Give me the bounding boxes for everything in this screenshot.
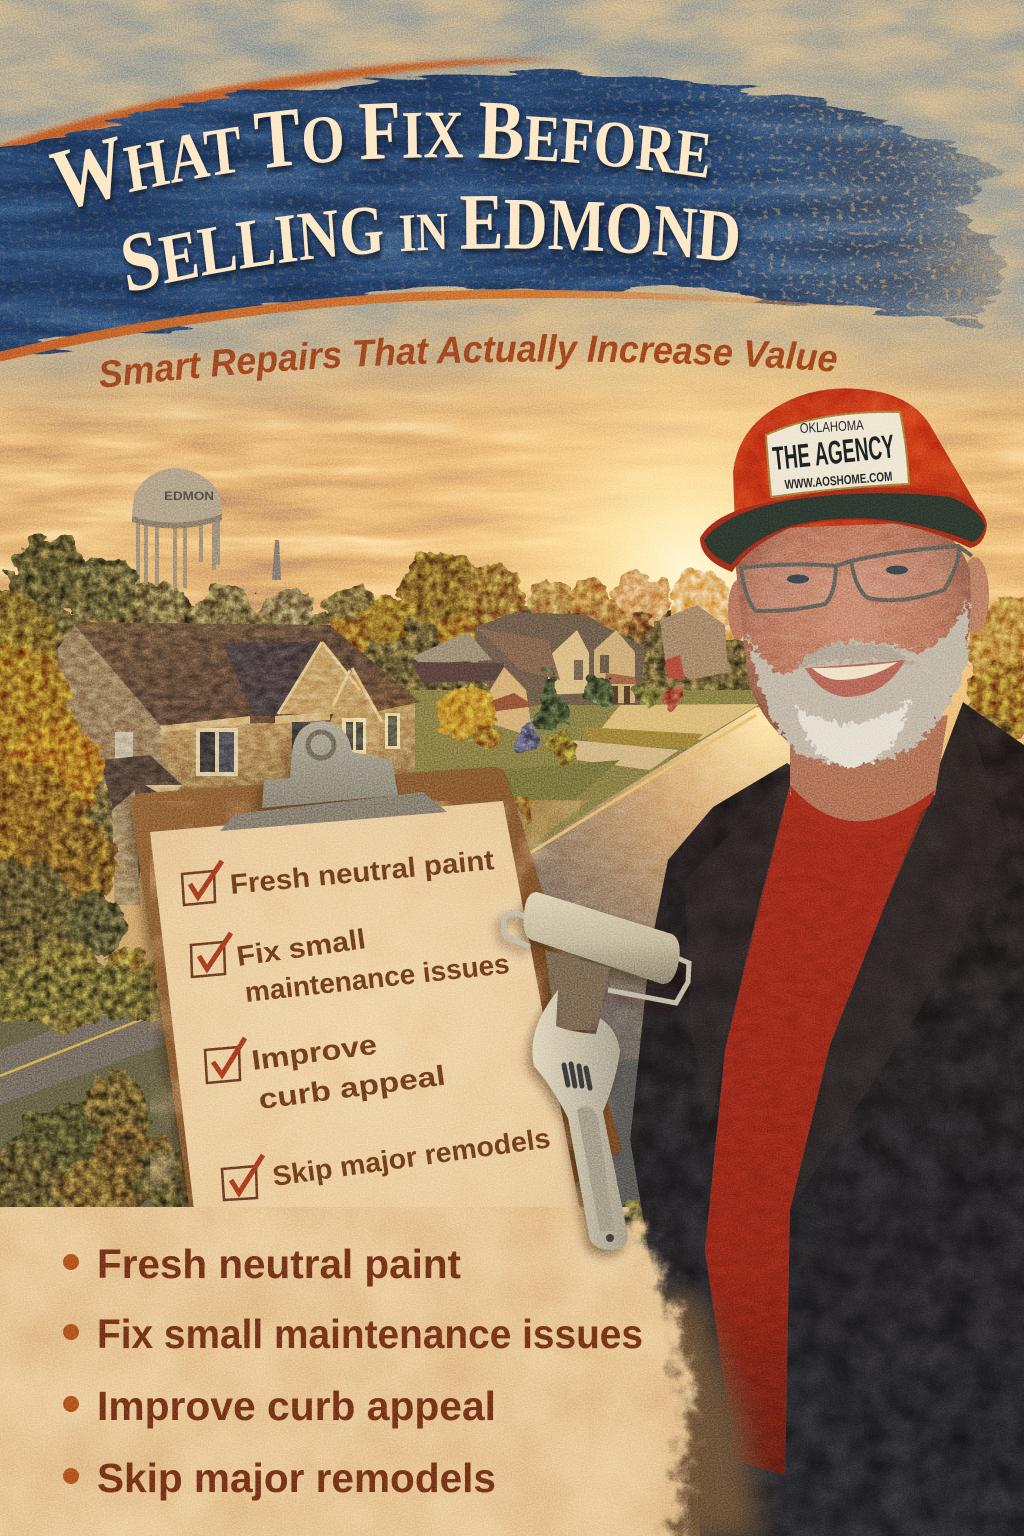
checklist item: improve curb appeal: curb appeal <box>257 1060 447 1115</box>
subtitle: Smart Repairs That Actually Increase Value <box>100 334 837 388</box>
license plate patch: WWW.AOSHOME.COM <box>784 469 893 492</box>
foliage right of man <box>965 595 1024 755</box>
paint roller <box>503 892 689 1030</box>
checklist item: fix small maintenance issues: maintenance issues <box>243 948 511 1008</box>
checklist item: fresh neutral paint: Fresh neutral paint <box>229 844 495 900</box>
clipboard board <box>131 767 622 1210</box>
left autumn tree <box>0 588 160 1030</box>
cap brim <box>704 493 985 565</box>
bullet: fresh neutral paint: Fresh neutral paint <box>97 1241 461 1287</box>
title banner <box>0 59 1010 375</box>
mouth <box>805 660 905 697</box>
lower-left shrubs <box>0 1075 195 1229</box>
nose <box>822 575 882 637</box>
distant tree line <box>0 535 766 860</box>
title: SELLING IN EDMOND <box>122 196 742 298</box>
left ear <box>728 580 748 640</box>
title <box>48 102 742 298</box>
beard <box>748 600 968 768</box>
neck <box>790 715 948 822</box>
street trees and shrubs <box>437 609 681 817</box>
bullet list <box>63 1241 643 1501</box>
adjustable wrench <box>532 990 628 1250</box>
bottom parchment panel <box>0 1170 690 1536</box>
red cap <box>700 388 987 572</box>
eyes <box>787 566 908 584</box>
paper stains <box>150 801 580 1210</box>
jacket <box>630 702 1024 1536</box>
man in hat and jacket <box>630 388 1024 1536</box>
face <box>735 507 971 765</box>
bullet: fix small maintenance issues: Fix small maintenance issues <box>97 1311 643 1357</box>
lawn and street <box>0 690 860 1260</box>
water tower <box>132 468 222 590</box>
foreground house <box>58 622 420 905</box>
title: WHAT TO FIX BEFORE <box>48 102 712 214</box>
bullet: skip major remodels: Skip major remodels <box>97 1455 496 1501</box>
jacket lapels <box>685 704 1008 1210</box>
checklist item: improve curb appeal <box>205 1029 447 1115</box>
shrub beside jacket <box>616 1196 664 1244</box>
checklist item: skip major remodels: Skip major remodels <box>271 1122 552 1192</box>
bullet: improve curb appeal: Improve curb appeal <box>97 1383 496 1429</box>
shirt collar <box>790 785 935 835</box>
banner tan flecks <box>0 72 1010 375</box>
right ear <box>961 557 989 633</box>
banner blue brush <box>0 72 1010 375</box>
red shirt <box>705 785 935 1475</box>
license plate patch: OKLAHOMA <box>799 417 865 436</box>
license plate patch: THE AGENCY <box>771 427 896 477</box>
license plate patch <box>766 412 909 497</box>
clipboard clip <box>220 721 447 831</box>
checklist item: fix small maintenance issues: Fix small <box>235 923 368 972</box>
clipboard <box>131 721 622 1210</box>
checklist item: fix small maintenance issues <box>191 923 511 1008</box>
banner orange top stroke <box>0 59 560 160</box>
glasses <box>741 546 972 611</box>
water tower: EDMON <box>164 489 214 503</box>
banner orange bottom stroke <box>0 290 900 364</box>
neighborhood houses <box>412 605 728 737</box>
checklist item: improve curb appeal: Improve <box>250 1029 379 1076</box>
clipboard paper <box>150 801 580 1210</box>
stippled transition between panel and jacket <box>620 1290 760 1536</box>
distant steeple <box>272 540 281 580</box>
